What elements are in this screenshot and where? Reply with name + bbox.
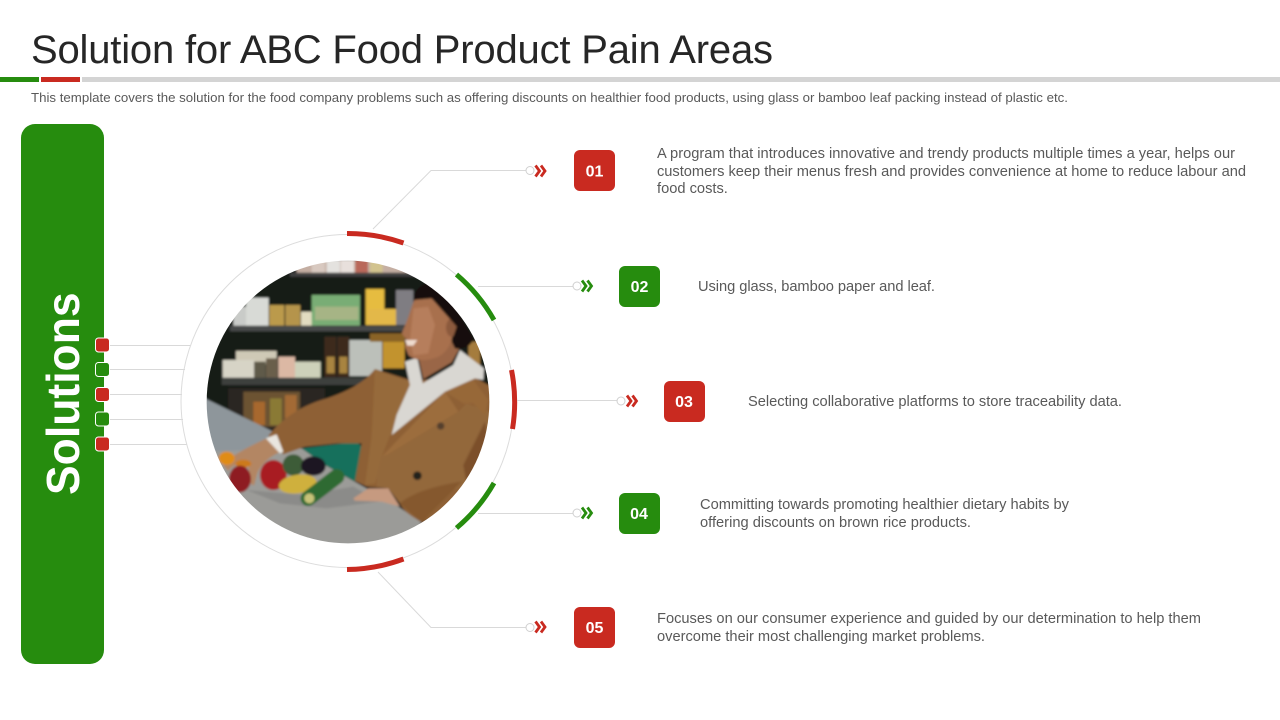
chevrons 02 (582, 280, 592, 292)
produce (219, 452, 337, 503)
badge 02: 02 (631, 279, 648, 296)
hair (413, 284, 473, 349)
item 04 (478, 493, 1070, 534)
connector lines from panel to circle (109, 346, 191, 444)
badge 05 (574, 607, 615, 648)
middle shelf goods (230, 289, 413, 331)
text 04 (700, 497, 1070, 531)
photo: shopper at grocery counter (206, 260, 490, 544)
text 01: customers keep their menus fresh and provides convenience at home to reduce labour and (657, 164, 1246, 180)
right background goods (468, 342, 480, 367)
badge 04 (619, 493, 660, 534)
accent arcs (347, 233, 515, 569)
text 05: overcome their most challenging market problems. (657, 629, 985, 645)
counter (206, 397, 274, 452)
badge 01 (574, 150, 615, 191)
text 01: food costs. (657, 181, 728, 197)
text 03: Selecting collaborative platforms to store traceability data. (748, 394, 1122, 410)
chevrons 05 (536, 622, 545, 632)
item 05 (378, 572, 1201, 648)
connector 03 (517, 397, 625, 405)
text 01: A program that introduces innovative and trendy products multiple times a year, helps our (657, 146, 1235, 162)
badge 04: 04 (630, 506, 648, 523)
item 03 (517, 381, 1122, 422)
top shelf goods (290, 260, 420, 277)
badge 05: 05 (586, 620, 604, 637)
connector 05 (378, 572, 534, 632)
badge 02 (619, 266, 660, 307)
lower shelf goods (222, 333, 405, 430)
connector 04 (478, 509, 581, 517)
text 04: Committing towards promoting healthier dietary habits by (700, 497, 1070, 513)
badge 03 (664, 381, 705, 422)
chevrons 04 (582, 508, 592, 518)
text 05 (657, 611, 1201, 645)
item 02 (478, 266, 935, 307)
coat (268, 369, 500, 522)
text 04: offering discounts on brown rice products. (700, 515, 971, 531)
text 05: Focuses on our consumer experience and guided by our determination to help them (657, 611, 1201, 627)
neck and face (418, 337, 459, 379)
panel markers (96, 338, 110, 451)
title: Solution for ABC Food Product Pain Areas (31, 28, 773, 72)
chevrons 03 (627, 396, 636, 406)
arm hand (223, 438, 279, 486)
title rule (0, 77, 1280, 82)
item 01 (373, 146, 1246, 229)
bag (302, 442, 362, 482)
connector 02 (478, 282, 581, 290)
connector 01 (373, 166, 534, 229)
badge 03: 03 (675, 394, 693, 411)
text 01 (657, 146, 1246, 197)
badge 01: 01 (586, 164, 604, 180)
hoodie (392, 350, 484, 435)
subtitle: This template covers the solution for the food company problems such as offering discounts on healthier food products, using glass or bamboo leaf packing instead of plastic etc. (31, 90, 1068, 105)
panel: solutions (21, 124, 104, 664)
text 02: Using glass, bamboo paper and leaf. (698, 279, 935, 295)
chevrons 01 (536, 166, 545, 176)
panel heading: Solutions (37, 292, 89, 495)
outer ring (181, 234, 514, 568)
